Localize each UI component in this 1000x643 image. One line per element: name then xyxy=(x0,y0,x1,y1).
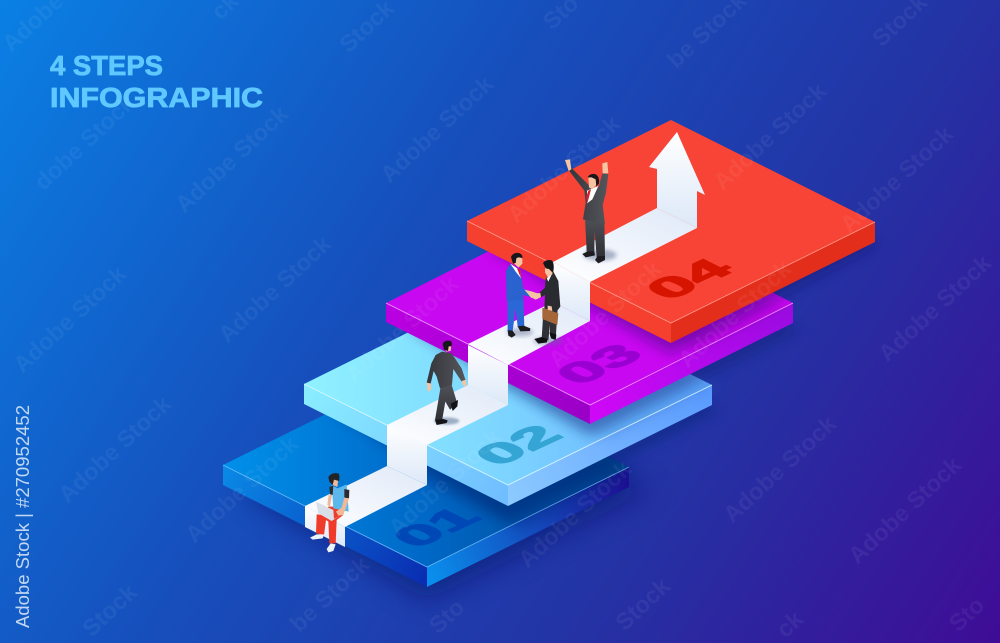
watermarks: Stock xyxy=(77,578,142,641)
figure: walking man xyxy=(427,341,466,425)
watermarks: dobe Stock xyxy=(29,89,140,195)
arrow head and shaft xyxy=(649,132,705,228)
watermarks: Adobe Stock xyxy=(708,77,832,195)
man in blue suit xyxy=(506,253,540,338)
watermarks: Adobe Stock xyxy=(873,249,997,367)
title xyxy=(50,50,263,113)
stair tread 3 xyxy=(468,302,590,365)
number 02: 02 xyxy=(462,419,573,471)
stair tread 1 xyxy=(305,466,427,527)
watermarks: Sto xyxy=(424,594,469,639)
stair riser 3 xyxy=(468,345,508,405)
watermarks: ck xyxy=(771,605,809,643)
stair riser 1 xyxy=(305,506,345,547)
watermarks: Adobe Stock xyxy=(835,120,959,238)
watermarks: Adobe Stock xyxy=(718,410,842,528)
watermarks: Adobe Stock xyxy=(843,451,967,569)
watermarks: Adobe Stock xyxy=(375,70,499,188)
watermarks: Adobe Stock xyxy=(170,100,294,218)
title: INFOGRAPHIC xyxy=(50,82,263,113)
number 04: 04 xyxy=(633,253,744,305)
stair riser 4 xyxy=(553,262,590,321)
watermarks: Sto xyxy=(944,592,989,637)
step 01 platform xyxy=(223,365,650,600)
laptop xyxy=(316,502,340,521)
watermarks: Adobe Stock xyxy=(8,260,132,378)
step 04 platform xyxy=(467,120,880,355)
stair tread 2 xyxy=(387,385,508,445)
watermarks: Adobe Stock xyxy=(180,430,304,548)
figure: two men shaking hands xyxy=(506,253,563,345)
stair tread 4 xyxy=(553,208,697,282)
briefcase xyxy=(542,308,558,325)
watermarks: be Stock xyxy=(285,551,375,637)
watermarks: Adobe Stock xyxy=(53,390,177,508)
watermarks: Adobe Stock xyxy=(673,255,797,373)
watermarks: Adobe Stock xyxy=(502,110,626,228)
watermarks: Stock xyxy=(610,572,675,635)
title: 4 STEPS xyxy=(50,50,163,81)
step 03 platform xyxy=(386,200,800,436)
number 03: 03 xyxy=(543,338,654,390)
stair riser 2 xyxy=(387,425,427,485)
watermarks: Adobe Stock xyxy=(213,230,337,348)
stock id vertical text: Adobe Stock | #270952452 xyxy=(13,405,33,628)
step 02 platform xyxy=(304,283,720,520)
white staircase path and arrow xyxy=(305,132,705,547)
number 01: 01 xyxy=(380,501,491,553)
figure: man with raised arms xyxy=(565,159,617,263)
figure: person sitting with laptop xyxy=(310,473,349,552)
watermarks: Adobe Stock xyxy=(543,255,667,373)
watermarks: Adobe Stock xyxy=(340,270,464,388)
watermarks: Adobe Stock xyxy=(513,455,637,573)
man in black suit with briefcase xyxy=(532,260,563,345)
watermarks: Adobe Stock xyxy=(383,423,507,541)
